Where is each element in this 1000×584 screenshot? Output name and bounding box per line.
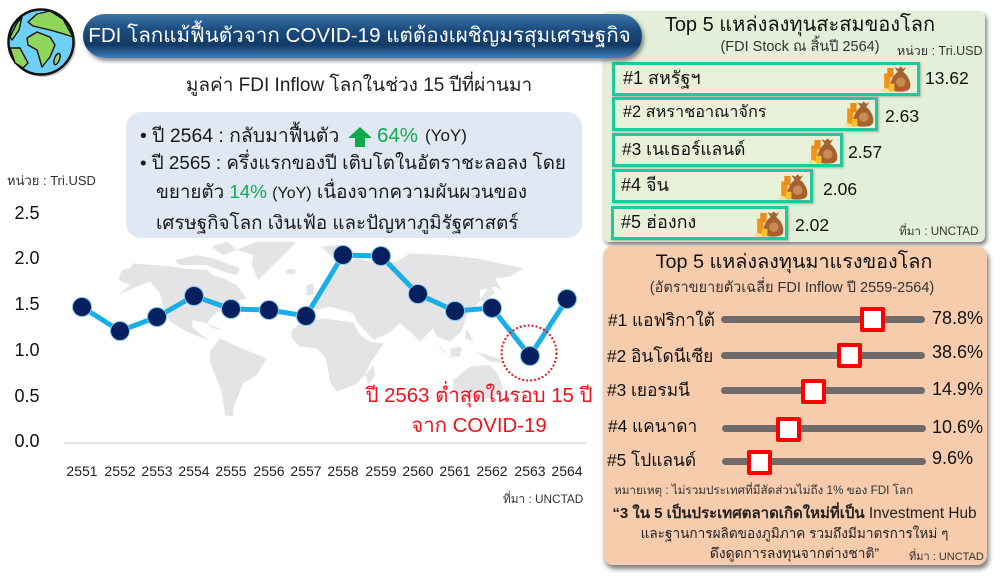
year labels: 2553 (141, 463, 173, 479)
bar 5 (611, 206, 788, 240)
bullet 2565: • ปี 2565 : ครึ่งแรกของปี เติบโตในอัตราชะลอลง โดย (140, 152, 566, 173)
percent 3: 14.9% (932, 379, 983, 399)
panel: top 5 FDI stock (603, 11, 985, 242)
quote: ดึงดูดการลงทุนจากต่างชาติ” (710, 546, 879, 561)
panel: top 5 growth (603, 246, 987, 565)
quote (612, 502, 977, 562)
axis values: 2.5 (14, 203, 40, 223)
icon: money bag 2 (844, 101, 874, 127)
slider knob 2 (837, 343, 862, 368)
red annotation: ปี 2563 ต่ำสุดในรอบ 15 ปี (365, 385, 592, 407)
percent 4: 10.6% (932, 417, 983, 437)
value 3: 2.57 (848, 142, 882, 162)
red annotation (365, 381, 592, 437)
heading: top 5 growth: Top 5 แหล่งลงทุนมาแรงของโลก (656, 251, 932, 273)
callout: key points (126, 112, 582, 238)
year labels: 2555 (215, 463, 247, 479)
slider knob 3 (801, 379, 826, 404)
axis values: 0.0 (14, 431, 40, 451)
bullet 2565 (140, 150, 566, 234)
label 1: #1 แอฟริกาใต้ (608, 310, 715, 330)
bar 2: #2 สหราชอาณาจักร (623, 103, 767, 121)
axis values (14, 203, 40, 451)
label 3: #3 เยอรมนี (607, 380, 690, 400)
bar 4 (612, 169, 813, 203)
title banner (83, 14, 642, 58)
slider 4 (722, 425, 926, 432)
percent 2: 38.6% (932, 342, 983, 362)
bullet 2565: เศรษฐกิจโลก เงินเฟ้อ และปัญหาภูมิรัฐศาสตร์ (156, 212, 518, 233)
year labels: 2560 (402, 463, 434, 479)
value 5: 2.02 (795, 215, 829, 235)
year labels: 2564 (551, 463, 583, 479)
bar 2 (612, 97, 878, 131)
percent 1: 78.8% (932, 308, 983, 328)
slider knob 5 (747, 450, 772, 475)
bar 5: #5 ฮ่องกง (621, 212, 696, 232)
axis values: 1.0 (14, 340, 40, 360)
icon: money bag 5 (754, 211, 784, 237)
bar 1: #1 สหรัฐฯ (623, 68, 701, 88)
quote: และฐานการผลิตของภูมิภาค รวมถึงมีมาตรการใหม่ ๆ (641, 526, 948, 541)
note: หมายเหตุ : ไม่รวมประเทศที่มีสัดส่วนไม่ถึง 1% ของ FDI โลก (614, 484, 913, 497)
icon: money bag 4 (778, 174, 808, 200)
year labels: 2561 (439, 463, 471, 479)
axis values: 1.5 (14, 294, 40, 314)
subheading: top 5 stock: (FDI Stock ณ สิ้นปี 2564) (720, 39, 880, 55)
heading: top 5 stock: Top 5 แหล่งลงทุนสะสมของโลก (665, 14, 935, 36)
quote: “3 ใน 5 เป็นประเทศตลาดเกิดใหม่ที่เป็น Investment Hub (612, 505, 977, 522)
chart heading: มูลค่า FDI Inflow โลกในช่วง 15 ปีที่ผ่านมา (186, 75, 532, 96)
year labels: 2559 (365, 463, 397, 479)
subheading: top 5 growth: (อัตราขยายตัวเฉลี่ย FDI Inflow ปี 2559-2564) (650, 280, 934, 296)
year labels: 2556 (253, 463, 285, 479)
unit label: หน่วย : Tri.USD (7, 173, 96, 188)
slider 5 (722, 458, 926, 465)
bar 4: #4 จีน (621, 175, 669, 195)
value 2: 2.63 (885, 106, 919, 126)
percent 5: 9.6% (932, 448, 973, 468)
slider 1 (721, 316, 925, 323)
year labels: 2552 (104, 463, 136, 479)
year labels: 2558 (327, 463, 359, 479)
icon: money bag 1 (882, 66, 910, 92)
bar 3: #3 เนเธอร์แลนด์ (622, 139, 745, 159)
year labels: 2557 (290, 463, 322, 479)
bullet 2565: ขยายตัว 14% (YoY) เนื่องจากความผันผวนของ (156, 181, 527, 202)
icon: up arrow (348, 127, 372, 147)
growth figure: 64% (377, 124, 418, 147)
title banner: FDI โลกแม้ฟื้นตัวจาก COVID-19 แต่ต้องเผชิญมรสุมเศรษฐกิจ (88, 24, 631, 47)
slider 2 (721, 352, 925, 359)
YoY tag: (YoY) (425, 126, 467, 145)
year labels (66, 463, 583, 479)
unit label: stock: หน่วย : Tri.USD (897, 44, 983, 58)
bar 3 (612, 133, 843, 167)
year labels: 2563 (514, 463, 546, 479)
source: growth: ที่มา : UNCTAD (909, 551, 984, 563)
year labels: 2551 (66, 463, 98, 479)
world map background (118, 242, 523, 417)
data line (82, 255, 567, 356)
icon: globe (7, 8, 76, 77)
red annotation: จาก COVID-19 (411, 415, 547, 437)
year labels: 2554 (178, 463, 210, 479)
icon: money bag 3 (808, 138, 838, 164)
label 4: #4 แคนาดา (608, 416, 697, 436)
bullet 2564: • ปี 2564 : กลับมาฟื้นตัว (140, 125, 339, 147)
value 1: 13.62 (925, 68, 969, 88)
bar 1 (612, 62, 920, 96)
axis values: 0.5 (14, 386, 40, 406)
lowest point highlight (502, 326, 556, 380)
slider knob 1 (860, 307, 885, 332)
slider knob 4 (776, 417, 801, 442)
line chart with world map (14, 203, 586, 479)
label 2: #2 อินโดนีเซีย (607, 346, 713, 366)
label 5: #5 โปแลนด์ (607, 450, 696, 470)
bullet 2564 (140, 122, 467, 147)
data points (72, 246, 576, 366)
year labels: 2562 (476, 463, 508, 479)
slider 3 (721, 387, 925, 394)
value 4: 2.06 (823, 179, 857, 199)
chart source: ที่มา : UNCTAD (503, 492, 583, 506)
source: stock: ที่มา : UNCTAD (899, 225, 979, 238)
axis values: 2.0 (14, 248, 40, 268)
